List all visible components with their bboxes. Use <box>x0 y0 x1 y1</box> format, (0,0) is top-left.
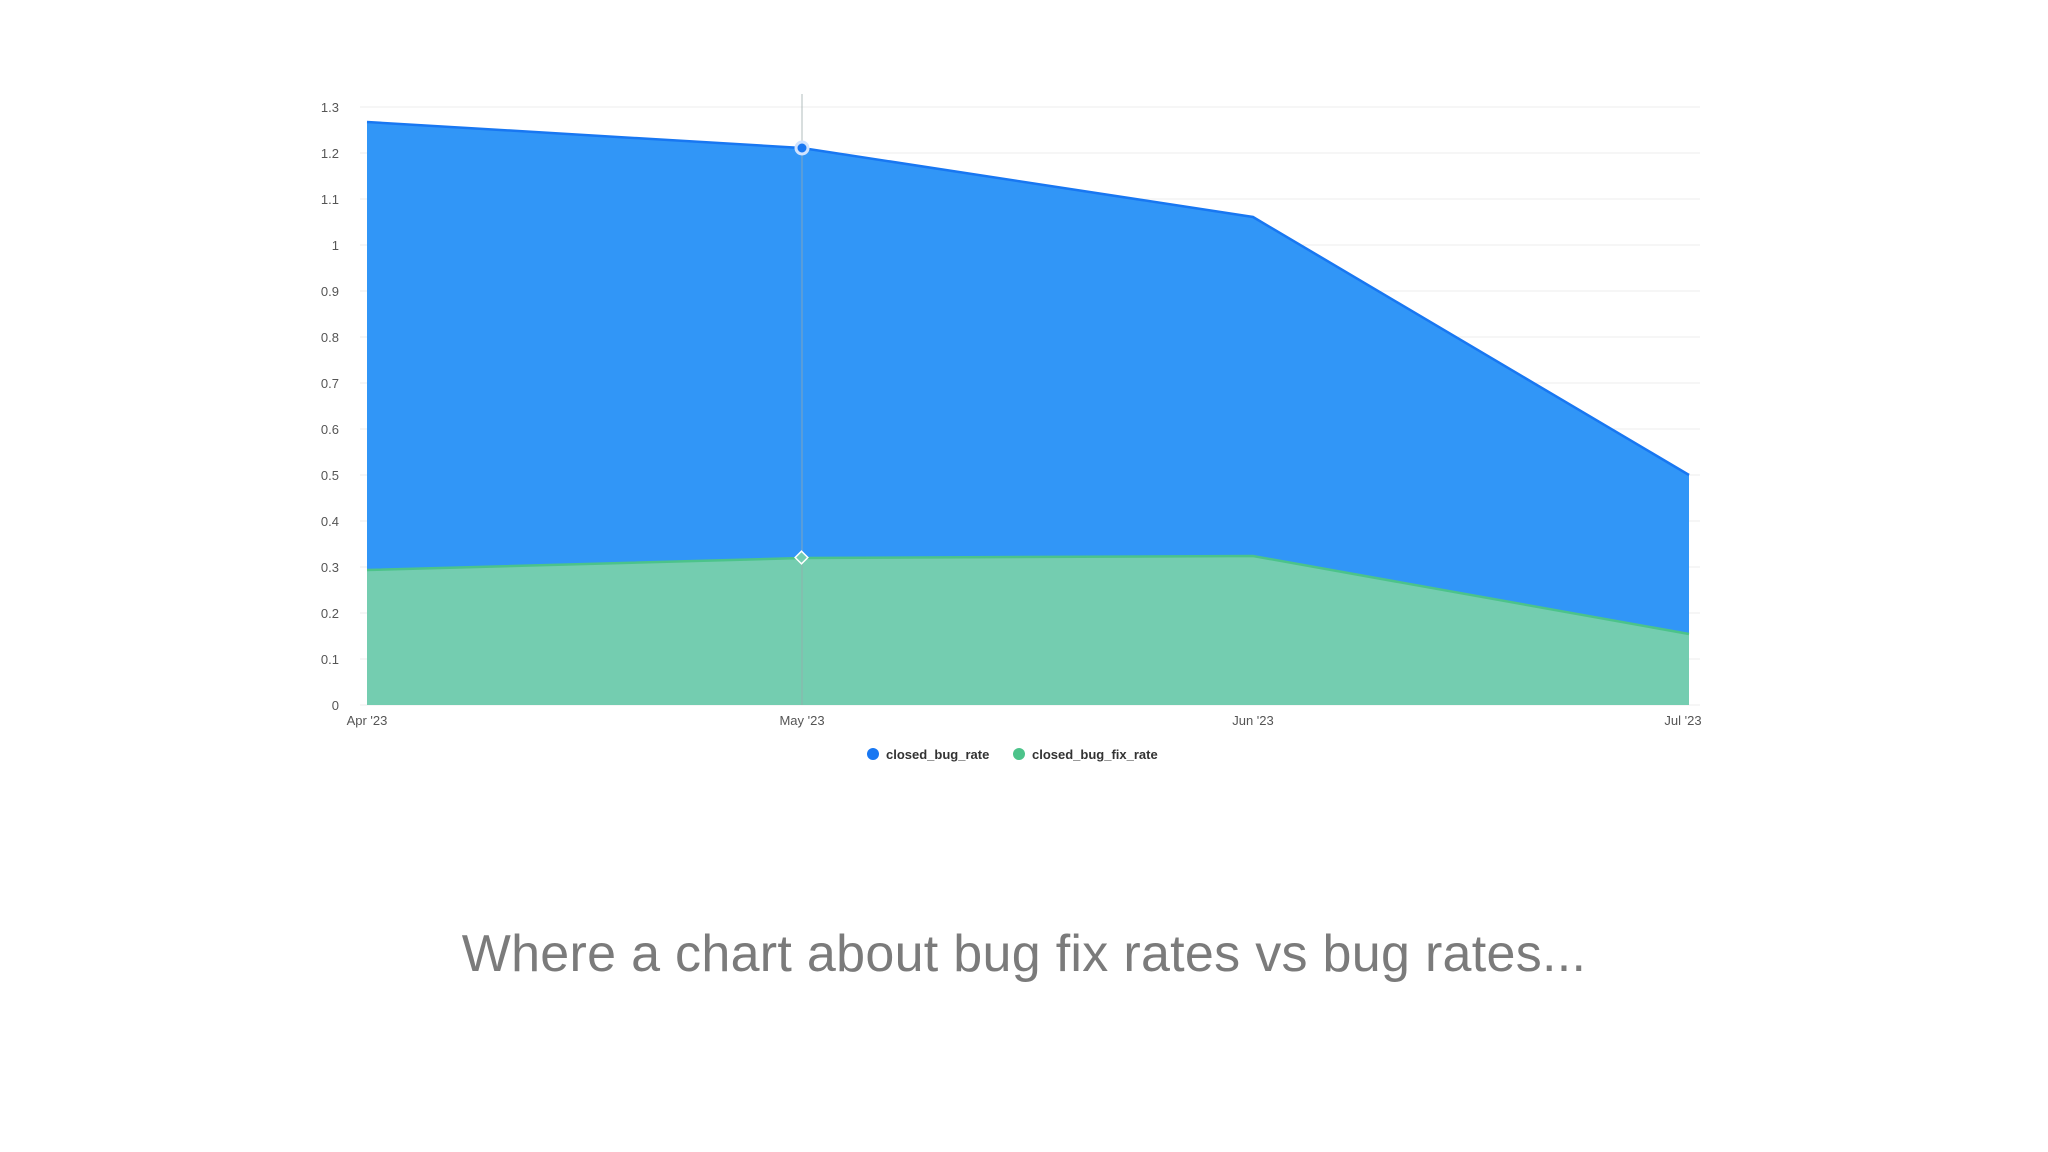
crosshair <box>795 94 808 705</box>
caption: Where a chart about bug fix rates vs bug rates... <box>462 925 1586 983</box>
area: closed_bug_fix_rate <box>367 556 1689 705</box>
area: closed_bug_rate <box>367 122 1689 705</box>
y axis labels <box>321 100 339 713</box>
x axis labels: Jun '23 <box>1232 713 1274 728</box>
y axis labels: 0.7 <box>321 376 339 391</box>
y axis labels: 0.5 <box>321 468 339 483</box>
legend: closed_bug_fix_rate <box>1032 747 1158 762</box>
y axis labels: 0.3 <box>321 560 339 575</box>
y axis labels: 0 <box>332 698 339 713</box>
y axis labels: 1.3 <box>321 100 339 115</box>
y axis labels: 0.1 <box>321 652 339 667</box>
y axis labels: 1 <box>332 238 339 253</box>
x axis labels: May '23 <box>779 713 825 728</box>
y axis labels: 0.4 <box>321 514 339 529</box>
y axis labels: 0.9 <box>321 284 339 299</box>
legend: closed_bug_rate <box>886 747 989 762</box>
y axis labels: 0.2 <box>321 606 339 621</box>
legend <box>867 747 1158 762</box>
x axis labels <box>347 713 1702 728</box>
y axis labels: 0.8 <box>321 330 339 345</box>
chart <box>321 94 1702 762</box>
x axis labels: Jul '23 <box>1664 713 1702 728</box>
y axis labels: 0.6 <box>321 422 339 437</box>
x axis labels: Apr '23 <box>347 713 387 728</box>
y axis labels: 1.1 <box>321 192 339 207</box>
y axis labels: 1.2 <box>321 146 339 161</box>
